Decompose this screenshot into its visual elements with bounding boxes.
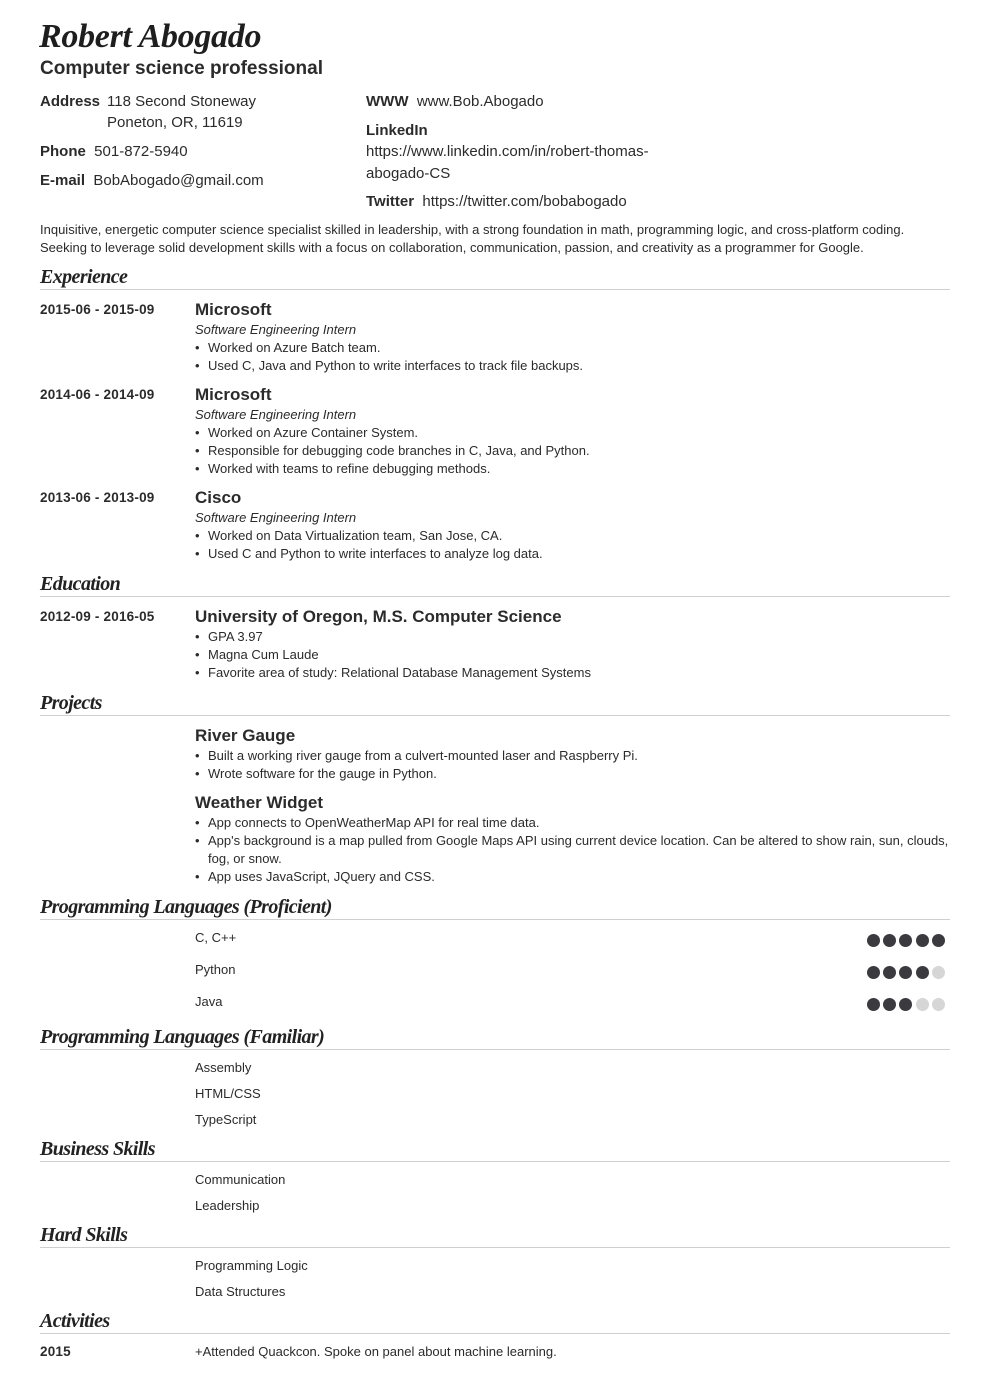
contact: left column: 118 Second Stoneway	[107, 93, 256, 110]
experience entries: Software Engineering Intern	[195, 407, 356, 422]
summary: Inquisitive, energetic computer science specialist skilled in leadership, with a strong foundation in math, programming logic, and cross-platform coding.	[40, 222, 904, 237]
projects entries	[195, 726, 948, 884]
education entry: Favorite area of study: Relational Database Management Systems	[208, 665, 591, 680]
summary: Seeking to leverage solid development skills with a focus on collaboration, communication, passion, and creativity as a programmer for Google.	[40, 240, 864, 255]
activities entry: +Attended Quackcon. Spoke on panel about machine learning.	[195, 1344, 557, 1359]
contact: left column: E-mail BobAbogado@gmail.com	[40, 172, 264, 189]
heading: Education: Education	[40, 573, 120, 595]
experience entries: 2013-06 - 2013-09	[40, 490, 154, 505]
heading: Experience: Experience	[40, 266, 127, 288]
education entry	[40, 607, 591, 680]
experience entries: Microsoft	[195, 300, 272, 319]
experience entries: Used C, Java and Python to write interfaces to track file backups.	[208, 358, 583, 373]
education entry: GPA 3.97	[208, 629, 263, 644]
hard skills list: Programming Logic	[195, 1258, 308, 1273]
projects entries: Wrote software for the gauge in Python.	[208, 766, 437, 781]
experience entries: 2015-06 - 2015-09	[40, 302, 154, 317]
familiar list: TypeScript	[195, 1112, 256, 1127]
contact: left column: Poneton, OR, 11619	[107, 114, 243, 131]
familiar list	[195, 1060, 261, 1127]
projects entries: App connects to OpenWeatherMap API for real time data.	[208, 815, 539, 830]
experience entries: 2014-06 - 2014-09	[40, 387, 154, 402]
contact: right column: https://www.linkedin.com/in/robert-thomas-	[366, 143, 649, 160]
heading: Business Skills: Business Skills	[40, 1138, 155, 1160]
contact: right column	[366, 93, 649, 210]
heading: Projects: Projects	[40, 692, 102, 714]
contact: right column: abogado-CS	[366, 165, 450, 182]
contact: left column: Phone 501-872-5940	[40, 143, 188, 160]
projects entries: App's background is a map pulled from Google Maps API using current device location. Can be altered to show rain, sun, clouds,	[208, 833, 948, 848]
projects entries: River Gauge	[195, 726, 295, 745]
education entry: University of Oregon, M.S. Computer Science	[195, 607, 562, 626]
experience entries: Worked with teams to refine debugging methods.	[208, 461, 490, 476]
contact: right column: WWW www.Bob.Abogado	[366, 93, 544, 110]
hard skills list: Data Structures	[195, 1284, 285, 1299]
header: name: Robert Abogado	[39, 18, 261, 55]
heading: Programming Languages (Familiar): Programming Languages (Familiar)	[40, 1026, 324, 1048]
header: subtitle: Computer science professional	[40, 58, 323, 79]
contact: left column	[40, 93, 264, 189]
business list: Leadership	[195, 1198, 259, 1213]
contact: right column: Twitter https://twitter.com/bobabogado	[366, 193, 627, 210]
proficient skills with ratings	[195, 930, 945, 1011]
experience entries: Software Engineering Intern	[195, 510, 356, 525]
contact: right column: LinkedIn	[366, 122, 428, 139]
experience entries: Responsible for debugging code branches in C, Java, and Python.	[208, 443, 590, 458]
experience entries: Worked on Azure Container System.	[208, 425, 418, 440]
education entry: 2012-09 - 2016-05	[40, 609, 154, 624]
proficient skills with ratings: C, C++	[195, 930, 236, 945]
experience entries	[40, 300, 590, 561]
projects entries: App uses JavaScript, JQuery and CSS.	[208, 869, 435, 884]
familiar list: HTML/CSS	[195, 1086, 261, 1101]
proficient skills with ratings: Java	[195, 994, 222, 1009]
experience entries: Software Engineering Intern	[195, 322, 356, 337]
business list	[195, 1172, 285, 1213]
heading: Activities: Activities	[40, 1310, 110, 1332]
projects entries: Built a working river gauge from a culvert-mounted laser and Raspberry Pi.	[208, 748, 638, 763]
activities entry: 2015	[40, 1344, 71, 1359]
hard skills list	[195, 1258, 308, 1299]
proficient skills with ratings: Python	[195, 962, 235, 977]
heading: Hard Skills: Hard Skills	[40, 1224, 127, 1246]
projects entries: fog, or snow.	[208, 851, 282, 866]
experience entries: Worked on Data Virtualization team, San Jose, CA.	[208, 528, 502, 543]
projects entries: Weather Widget	[195, 793, 323, 812]
experience entries: Used C and Python to write interfaces to analyze log data.	[208, 546, 543, 561]
heading: Programming Languages (Proficient): Programming Languages (Proficient)	[40, 896, 332, 918]
education entry: Magna Cum Laude	[208, 647, 319, 662]
summary	[40, 222, 904, 255]
familiar list: Assembly	[195, 1060, 251, 1075]
experience entries: Cisco	[195, 488, 241, 507]
contact: left column: Address	[40, 93, 100, 110]
experience entries: Worked on Azure Batch team.	[208, 340, 380, 355]
business list: Communication	[195, 1172, 285, 1187]
experience entries: Microsoft	[195, 385, 272, 404]
